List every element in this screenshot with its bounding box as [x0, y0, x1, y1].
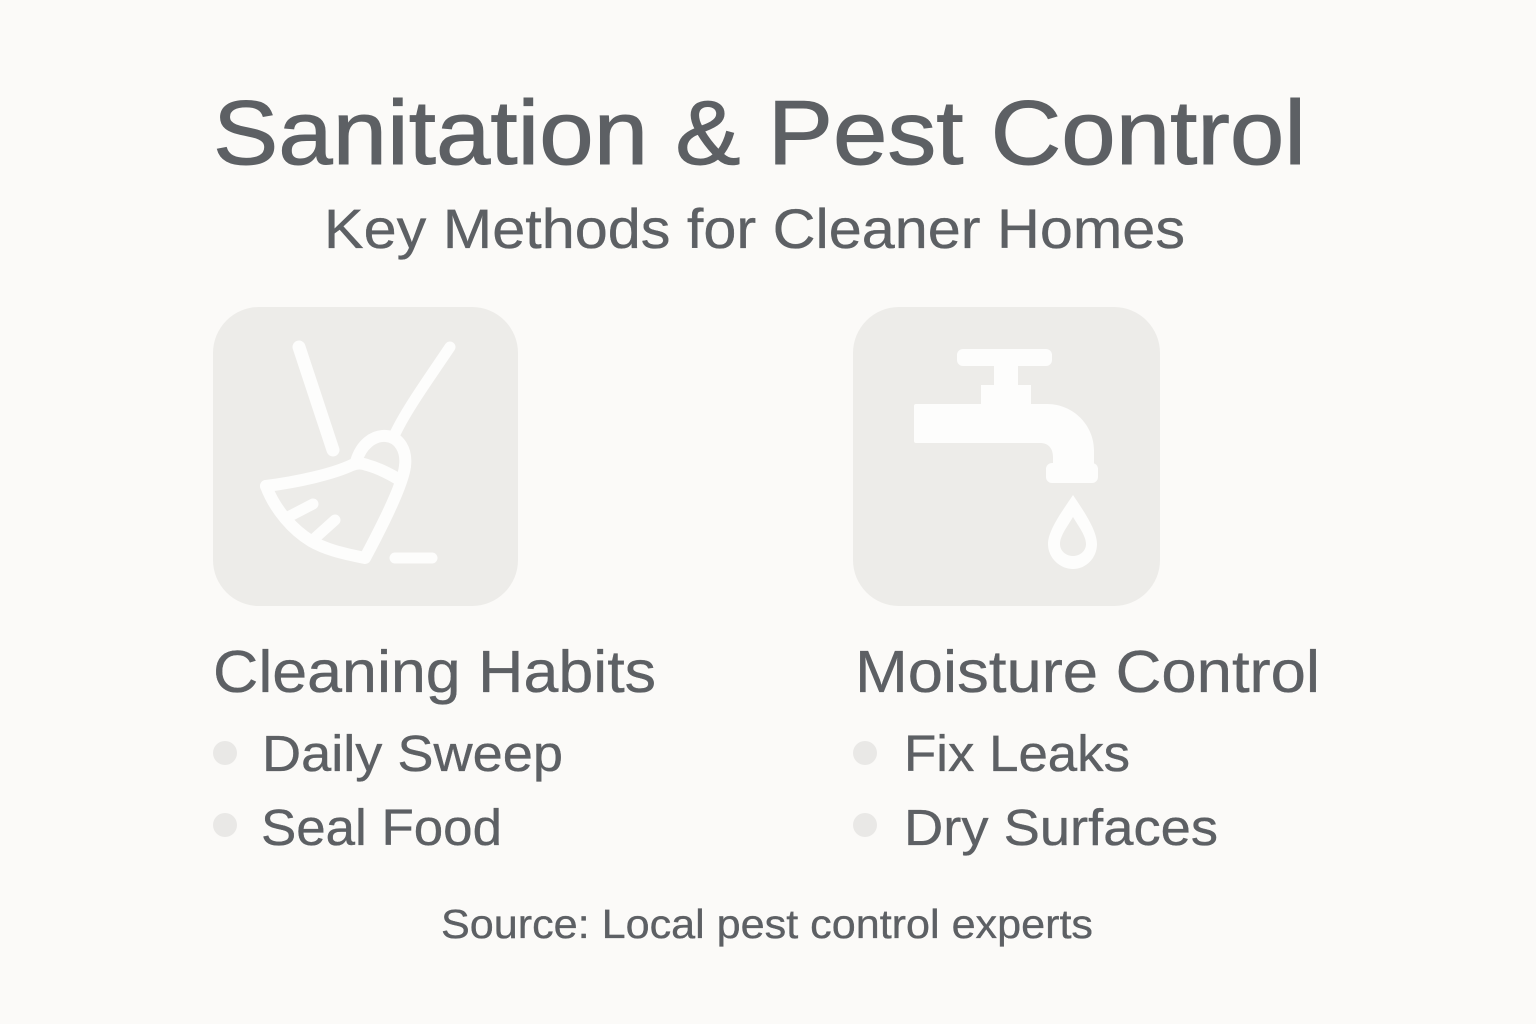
- text: daily sweep: Daily Sweep: [262, 725, 563, 782]
- icon: broom: [266, 347, 450, 558]
- icon: faucet with drop: [914, 349, 1098, 569]
- bullet: [853, 741, 877, 765]
- text: seal food: Seal Food: [261, 799, 502, 856]
- subtitle: Key Methods for Cleaner Homes: [324, 197, 1185, 260]
- source note: Source: Local pest control experts: [441, 901, 1093, 947]
- bullet: [853, 813, 877, 837]
- heading: cleaning habits: Cleaning Habits: [213, 639, 656, 705]
- bullet: [213, 741, 237, 765]
- text: fix leaks: Fix Leaks: [904, 725, 1130, 782]
- heading: moisture control: Moisture Control: [855, 639, 1320, 705]
- title: Sanitation & Pest Control: [213, 83, 1306, 184]
- panel: cleaning icon tile: [213, 307, 518, 606]
- bullet: [213, 813, 237, 837]
- panel: moisture icon tile: [853, 307, 1160, 606]
- text: dry surfaces: Dry Surfaces: [904, 799, 1218, 856]
